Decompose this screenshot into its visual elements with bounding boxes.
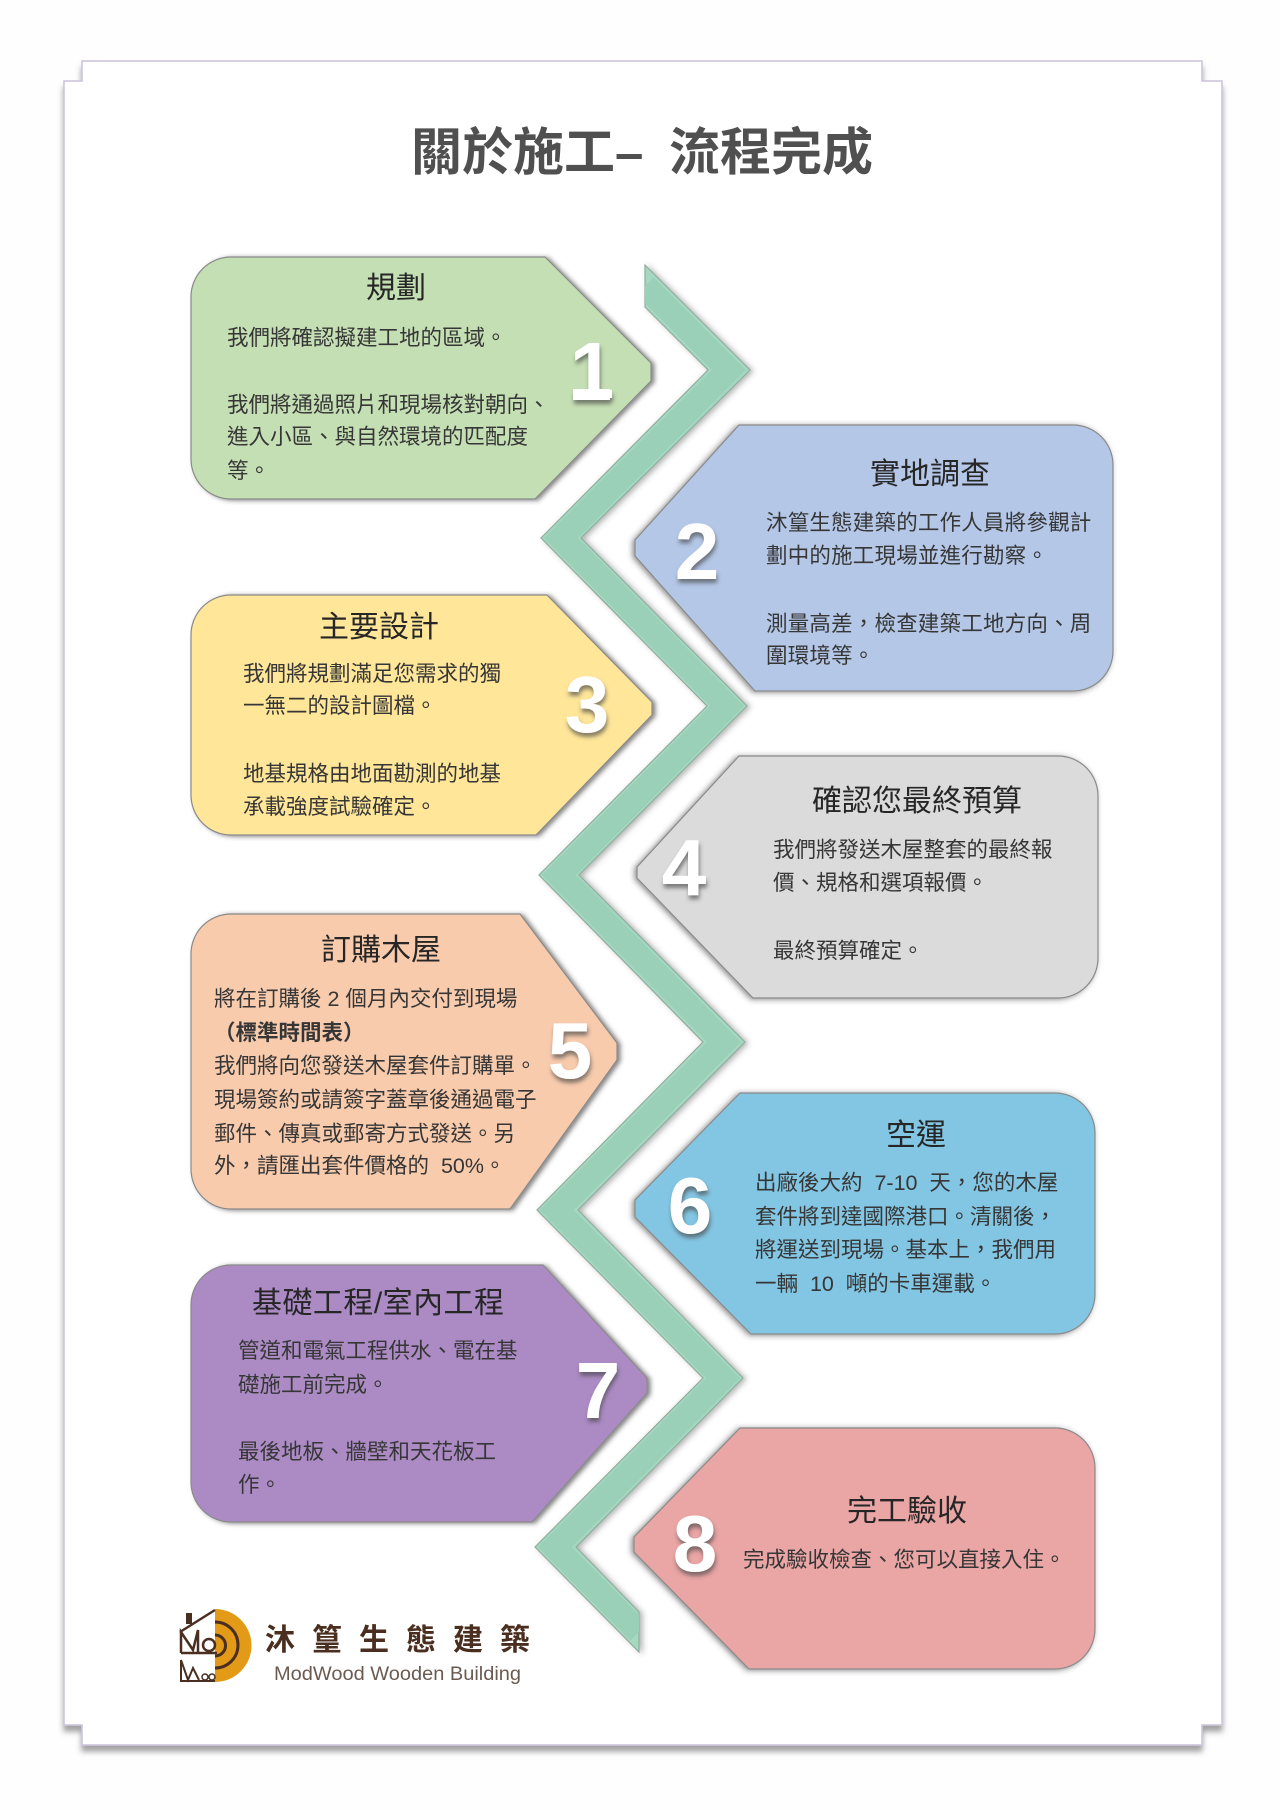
- step 2 body: 圍環境等。: [766, 644, 875, 668]
- step 3 body: 一無二的設計圖檔。: [243, 694, 437, 718]
- step 7 body: 管道和電氣工程供水、電在基: [238, 1339, 518, 1363]
- step 3 body: 地基規格由地面勘測的地基: [243, 762, 501, 786]
- step 4 body: 價、規格和選項報價。: [773, 871, 988, 895]
- step 6 body: 出廠後大約 7-10 天，您的木屋: [755, 1171, 1058, 1195]
- step 1 body: [227, 326, 550, 483]
- step 2 body: 沐篁生態建築的工作人員將參觀計: [766, 511, 1092, 535]
- step 8 number: 8: [673, 1499, 717, 1588]
- step 4 body: [773, 838, 1053, 963]
- step 7 body: 最後地板、牆壁和天花板工: [238, 1440, 496, 1464]
- step 5 shape: [191, 914, 617, 1209]
- step 5 body: 我們將向您發送木屋套件訂購單。: [214, 1054, 537, 1078]
- step 2 heading: 實地調查: [870, 458, 990, 491]
- logo english name: ModWood Wooden Building: [274, 1664, 521, 1685]
- step 5 body: 外，請匯出套件價格的 50%。: [214, 1154, 505, 1178]
- step 5 number: 5: [548, 1006, 592, 1095]
- step 1 number: 1: [570, 326, 614, 415]
- logo: [180, 1609, 547, 1685]
- step 4 body: 最終預算確定。: [773, 939, 924, 963]
- step 8 shape: [634, 1428, 1095, 1669]
- panel: step 7 基礎工程/室內工程: [191, 1265, 647, 1522]
- step 3 shape: [191, 595, 652, 835]
- step 6 body: 將運送到現場。基本上，我們用: [755, 1238, 1056, 1262]
- step 1 body: 我們將通過照片和現場核對朝向、: [227, 393, 550, 417]
- step 4 heading: 確認您最終預算: [812, 785, 1022, 818]
- step 5 heading: 訂購木屋: [321, 934, 441, 967]
- step 1 body: 等。: [227, 459, 270, 483]
- step 6 heading: 空運: [886, 1119, 946, 1152]
- panel: step 5 訂購木屋: [191, 914, 617, 1209]
- step 2 body: 測量高差，檢查建築工地方向、周: [766, 612, 1092, 636]
- icon: house and tree rings: [180, 1609, 252, 1682]
- step 1 body: 我們將確認擬建工地的區域。: [227, 326, 507, 350]
- step 4 number: 4: [662, 823, 707, 912]
- step 7 shape: [191, 1265, 647, 1522]
- panel: step 4 確認您最終預算: [637, 756, 1098, 998]
- step 6 body: [755, 1171, 1058, 1296]
- step 5 body: [214, 987, 537, 1178]
- step 3 heading: 主要設計: [319, 611, 439, 644]
- step 1 heading: 規劃: [366, 272, 426, 305]
- step 4 body: 我們將發送木屋整套的最終報: [773, 838, 1053, 862]
- step 7 number: 7: [576, 1346, 620, 1435]
- title: 關於施工–: [411, 124, 643, 181]
- step 6 body: 一輛 10 噸的卡車運載。: [755, 1272, 996, 1296]
- panel: step 6 空運: [635, 1093, 1095, 1334]
- step 6 body: 套件將到達國際港口。清關後，: [755, 1205, 1056, 1229]
- step 2 shape: [635, 425, 1113, 691]
- zigzag connector arrow: [535, 265, 750, 1652]
- step 2 body: 劃中的施工現場並進行勘察。: [766, 544, 1048, 568]
- step 3 body: [243, 662, 501, 819]
- panel: step 2 實地調查: [635, 425, 1113, 691]
- step 5 body: 現場簽約或請簽字蓋章後通過電子: [214, 1088, 537, 1112]
- title: 流程完成: [669, 124, 873, 181]
- step 6 number: 6: [668, 1161, 712, 1250]
- step 8 body: 完成驗收檢查、您可以直接入住。: [743, 1548, 1066, 1572]
- step 7 body: [238, 1339, 518, 1497]
- step 7 body: 作。: [238, 1473, 281, 1497]
- step 1 body: 進入小區、與自然環境的匹配度: [227, 425, 528, 449]
- step 3 body: 承載強度試驗確定。: [243, 795, 437, 819]
- step 4 shape: [637, 756, 1098, 998]
- step 2 number: 2: [675, 507, 719, 596]
- panel: step 3 主要設計: [191, 595, 652, 835]
- step 7 heading: 基礎工程/室內工程: [252, 1287, 504, 1320]
- step 7 body: 礎施工前完成。: [238, 1373, 389, 1397]
- logo name: 沐篁生態建築: [265, 1624, 547, 1657]
- panel: step 1 規劃: [191, 257, 651, 499]
- step 5 body: （標準時間表）: [214, 1021, 365, 1045]
- panel: step 8 完工驗收: [634, 1428, 1095, 1669]
- step 5 body: 郵件、傳真或郵寄方式發送。另: [214, 1122, 515, 1146]
- step 2 body: [766, 511, 1092, 668]
- step 8 heading: 完工驗收: [847, 1495, 967, 1528]
- step 3 number: 3: [565, 660, 609, 749]
- step 1 shape: [191, 257, 651, 499]
- step 3 body: 我們將規劃滿足您需求的獨: [243, 662, 501, 686]
- step 6 shape: [635, 1093, 1095, 1334]
- step 5 body: 將在訂購後 2 個月內交付到現場: [214, 987, 517, 1011]
